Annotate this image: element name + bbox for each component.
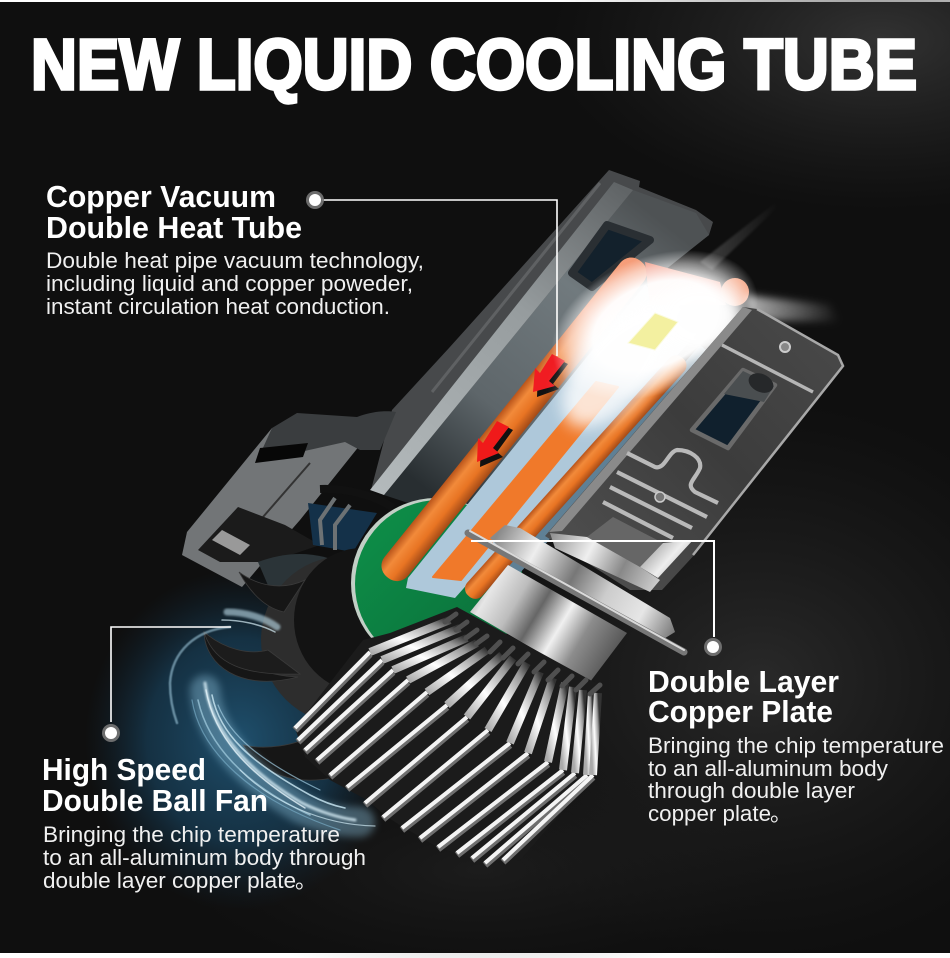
text block: high speed double ball fan: 。 — [295, 868, 317, 893]
text block: copper vacuum double heat tube — [46, 179, 424, 319]
text block: copper vacuum double heat tube: Double heat pipe vacuum technology, — [46, 248, 424, 273]
fan blades — [204, 572, 332, 780]
lower bracket metal — [550, 517, 693, 592]
bracket rivet — [655, 492, 665, 502]
text block: double layer copper plate: to an all-aluminum body — [648, 756, 888, 781]
fin root rings — [445, 614, 600, 694]
fan hub — [261, 548, 430, 724]
callout line: copper vacuum tube — [306, 191, 557, 356]
text block: high speed double ball fan: to an all-aluminum body through — [43, 845, 366, 870]
fin straight shadows — [295, 654, 593, 865]
callout line: double layer copper plate — [471, 541, 722, 656]
text block: high speed double ball fan: High Speed — [42, 752, 206, 787]
text block: high speed double ball fan: Bringing the chip temperature — [43, 822, 340, 847]
heat pipe right — [461, 351, 690, 603]
metal collar cylinder — [470, 565, 627, 682]
fin upper kinks — [370, 620, 598, 775]
heat pipe left — [376, 252, 652, 587]
LED chip — [628, 313, 678, 350]
blue air glow — [85, 570, 395, 910]
bracket grooves — [603, 450, 718, 538]
green copper plate base — [351, 498, 523, 668]
steel strip behind right pipe — [490, 345, 712, 590]
back fan assembly — [182, 411, 396, 600]
text block: copper vacuum double heat tube: Copper Vacuum — [46, 179, 276, 214]
text block: double layer copper plate: copper plate — [648, 801, 771, 826]
front bracket — [545, 307, 843, 592]
text block: double layer copper plate: 。 — [770, 801, 792, 826]
text block: high speed double ball fan: double layer copper plate — [43, 868, 296, 893]
text block: double layer copper plate: through double layer — [648, 778, 855, 803]
inner orange strip — [433, 382, 618, 580]
bracket hole — [780, 342, 790, 352]
red arrows — [477, 354, 568, 467]
text block: copper vacuum double heat tube: including liquid and copper poweder, — [46, 271, 413, 296]
text block: double layer copper plate: Bringing the chip temperature — [648, 733, 944, 758]
bracket top rib — [722, 345, 813, 392]
text block: high speed double ball fan: Double Ball Fan — [42, 783, 268, 818]
text block: double layer copper plate — [648, 664, 944, 826]
text block: copper vacuum double heat tube: instant circulation heat conduction. — [46, 294, 390, 319]
bracket window — [692, 369, 777, 448]
text block: double layer copper plate: Double Layer — [648, 664, 839, 699]
text block: copper vacuum double heat tube: Double Heat Tube — [46, 210, 302, 245]
fin highlights — [295, 652, 593, 863]
flange — [468, 525, 684, 652]
callout line: double ball fan — [102, 627, 231, 742]
text block: double layer copper plate: Copper Plate — [648, 694, 833, 729]
back heat sink board — [370, 170, 713, 525]
air swirl — [170, 612, 375, 830]
top pipe caps — [645, 262, 749, 306]
LED light glow — [529, 203, 840, 447]
finned aluminium heat sink — [295, 607, 603, 865]
text block: high speed double ball fan — [42, 752, 366, 893]
light blue copper plate — [406, 285, 705, 598]
